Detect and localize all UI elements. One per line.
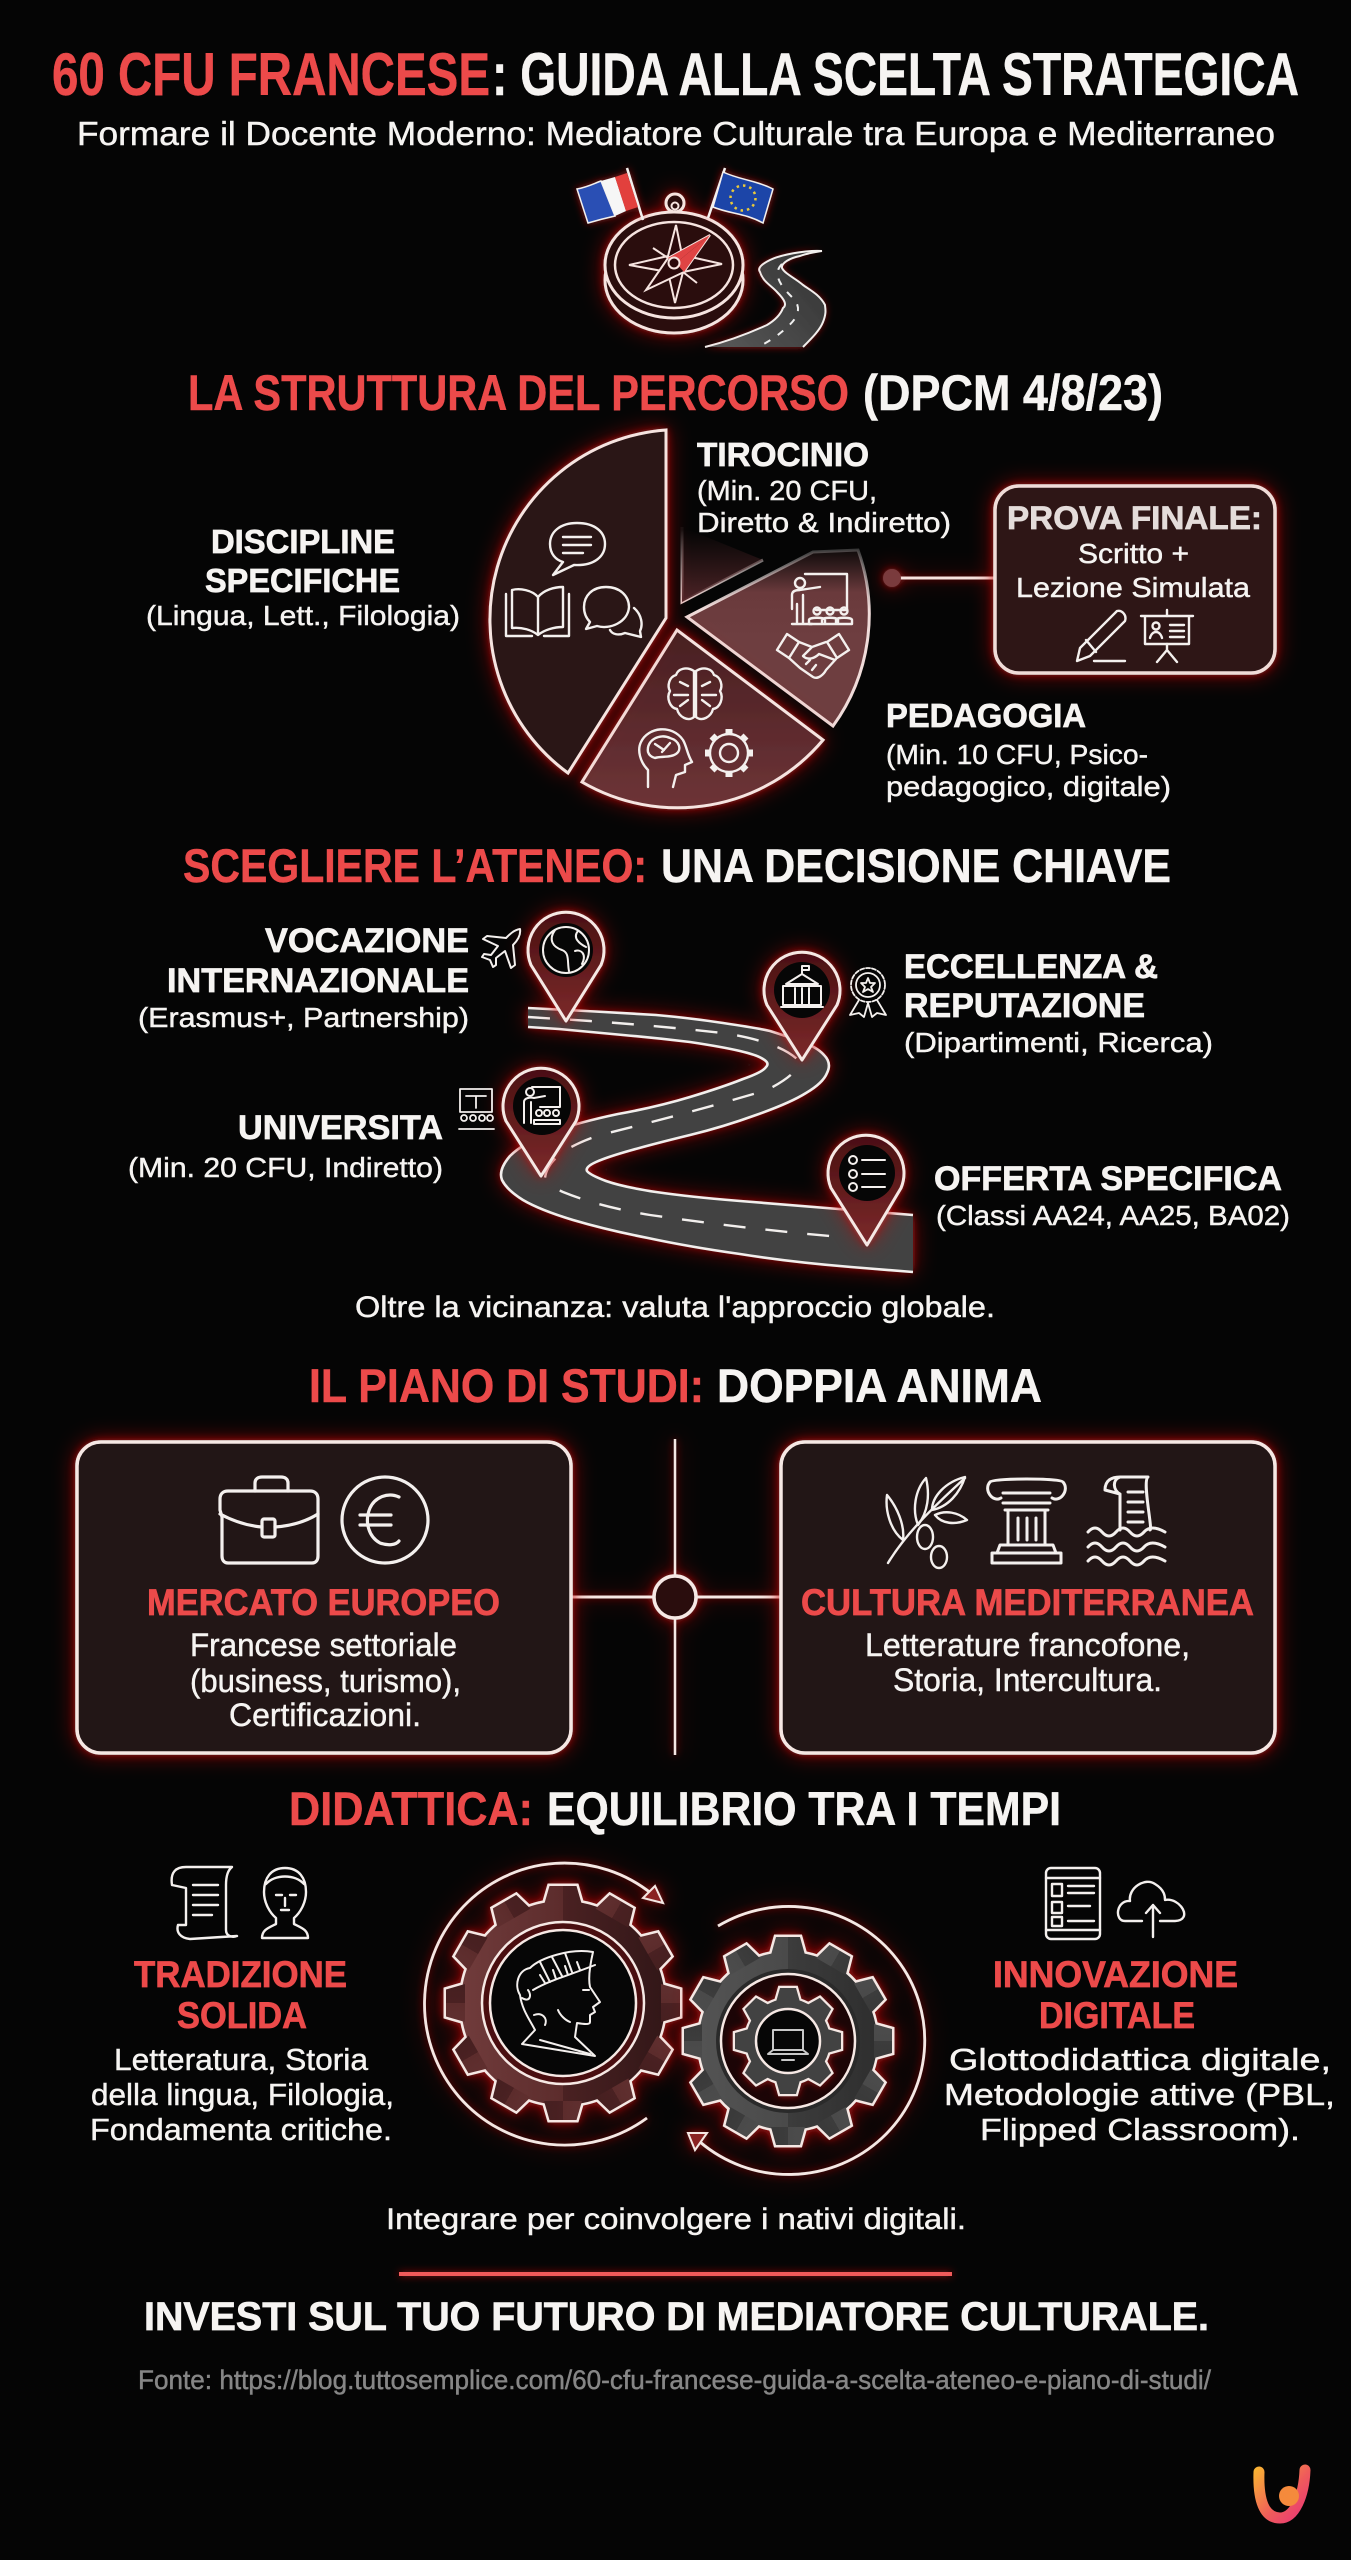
heading: didattica: [289, 1782, 1061, 1835]
panel: cultura mediterranea: [781, 1442, 1275, 1753]
label: innovazione digitale: Metodologie attive (PBL,: [944, 2077, 1335, 2112]
heading: il piano di studi: DOPPIA ANIMA: [717, 1359, 1042, 1412]
panel: cultura mediterranea: Storia, Intercultura.: [893, 1662, 1162, 1698]
winding road: [501, 1008, 913, 1272]
label: pedagogia: (Min. 10 CFU, Psico-: [886, 739, 1148, 770]
icon: teacher at board: [792, 574, 852, 624]
panel: mercato europeo: Certificazioni.: [229, 1697, 421, 1733]
divider with centre node: [570, 1439, 782, 1755]
panel: prova finale: [995, 486, 1275, 673]
label: innovazione digitale: [944, 1954, 1335, 2147]
label: offerta specifica: [934, 1160, 1290, 1231]
left gear with classical profile: [446, 1886, 680, 2120]
label: tradizione solida: della lingua, Filologia,: [91, 2077, 394, 2112]
icon: head with brain: [639, 729, 692, 787]
icon: open book: [506, 587, 569, 636]
pin 2: university building: [764, 952, 840, 1060]
icon: logo: [1259, 2470, 1305, 2518]
label: universita: (Min. 20 CFU, Indiretto): [128, 1152, 443, 1183]
panel: mercato europeo: MERCATO EUROPEO: [147, 1582, 500, 1623]
icon: parchment scroll: [172, 1867, 237, 1939]
label: tradizione solida: TRADIZIONE: [134, 1954, 347, 1995]
icon: winding road: [705, 251, 826, 347]
title: 60 CFU FRANCESE: [52, 41, 490, 108]
icon: airplane: [482, 929, 520, 968]
icon: euro coin: [342, 1477, 428, 1563]
icon: brain: [668, 668, 722, 719]
heading: il piano di studi: IL PIANO DI STUDI:: [309, 1359, 704, 1412]
label: vocazione internazionale: VOCAZIONE: [265, 922, 469, 960]
heading: scegliere l'ateneo: [183, 839, 1171, 892]
subtitle: Formare il Docente Moderno: Mediatore Culturale tra Europa e Mediterraneo: [77, 115, 1275, 152]
pin 1: globe: [528, 912, 604, 1021]
icon: speech bubble: [550, 523, 605, 575]
label: innovazione digitale: INNOVAZIONE: [993, 1954, 1238, 1995]
label: offerta specifica: OFFERTA SPECIFICA: [934, 1160, 1282, 1198]
icon: lecture board: [459, 1089, 494, 1129]
title: [52, 41, 1299, 108]
label: universita: [128, 1109, 443, 1183]
label: eccellenza e reputazione: REPUTAZIONE: [904, 987, 1145, 1025]
pin 4: checklist: [828, 1135, 904, 1245]
label: innovazione digitale: DIGITALE: [1039, 1995, 1195, 2036]
panel: prova finale: Lezione Simulata: [1016, 572, 1250, 603]
label: innovazione digitale: Flipped Classroom).: [980, 2112, 1300, 2147]
panel: mercato europeo: [77, 1442, 571, 1753]
icon: classical bust: [262, 1868, 308, 1938]
icon: handshake: [777, 634, 849, 678]
call to action: INVESTI SUL TUO FUTURO DI MEDIATORE CULTURALE.: [144, 2295, 1209, 2339]
icon: chat bubbles: [584, 587, 642, 637]
road lower edge: [501, 1027, 913, 1272]
label: vocazione internazionale: (Erasmus+, Partnership): [138, 1002, 469, 1033]
label: discipline specifiche: DISCIPLINE: [211, 523, 395, 560]
panel: mercato europeo: (business, turismo),: [190, 1663, 461, 1699]
icon: cloud upload: [1118, 1882, 1184, 1937]
label: tirocinio: Diretto & Indiretto): [697, 507, 951, 538]
slice: pedagogia: [582, 630, 823, 808]
panel: cultura mediterranea: Letterature francofone,: [865, 1627, 1190, 1663]
icon: compass with flags and road: [577, 168, 826, 348]
icon: gear: [705, 729, 753, 777]
label: tirocinio: [697, 436, 951, 538]
heading: il piano di studi: [309, 1359, 1042, 1412]
slice: tirocinio: [682, 527, 763, 602]
divider line: [399, 2272, 952, 2276]
label: tirocinio: (Min. 20 CFU,: [697, 475, 877, 506]
icon: olive branch: [887, 1477, 967, 1568]
label: innovazione digitale: Glottodidattica digitale,: [949, 2042, 1331, 2077]
icon: EU flag: [708, 168, 773, 223]
road with four stops: [501, 912, 913, 1272]
label: tirocinio: TIROCINIO: [697, 436, 869, 473]
label: pedagogia: pedagogico, digitale): [886, 771, 1171, 802]
panel: cultura mediterranea: CULTURA MEDITERRANEA: [801, 1582, 1254, 1623]
label: vocazione internazionale: [138, 922, 469, 1033]
heading: la struttura del percorso: (DPCM 4/8/23): [863, 365, 1163, 421]
icon: presentation easel: [1141, 610, 1193, 662]
label: discipline specifiche: SPECIFICHE: [205, 562, 400, 599]
graphic: interlocking gears: [425, 1863, 925, 2174]
arrow: around left gear: [425, 1863, 663, 2145]
panel: prova finale: PROVA FINALE:: [1007, 500, 1262, 536]
heading: la struttura del percorso: LA STRUTTURA DEL PERCORSO: [188, 365, 849, 421]
label: tradizione solida: Fondamenta critiche.: [90, 2112, 392, 2147]
caption: oltre la vicinanza: Oltre la vicinanza: valuta l'approccio globale.: [355, 1291, 995, 1324]
label: vocazione internazionale: INTERNAZIONALE: [167, 962, 469, 1000]
label: eccellenza e reputazione: ECCELLENZA &: [904, 948, 1158, 986]
heading: scegliere l'ateneo: UNA DECISIONE CHIAVE: [661, 839, 1171, 892]
icon: rosette: [850, 968, 886, 1017]
label: tradizione solida: [90, 1954, 394, 2147]
label: discipline specifiche: (Lingua, Lett., Filologia): [146, 600, 460, 631]
icon: briefcase: [220, 1477, 318, 1563]
slice: discipline specifiche: [490, 430, 666, 773]
label: pedagogia: [886, 697, 1171, 802]
label: universita: UNIVERSITA: [238, 1109, 443, 1147]
chart: pie of the course structure: [490, 430, 869, 808]
road centre dashes: [528, 1017, 830, 1236]
caption: integrare: Integrare per coinvolgere i nativi digitali.: [386, 2203, 966, 2236]
heading: didattica: EQUILIBRIO TRA I TEMPI: [547, 1782, 1061, 1835]
label: discipline specifiche: [146, 523, 460, 631]
slice: pratica e prova: [687, 550, 869, 726]
label: eccellenza e reputazione: (Dipartimenti, Ricerca): [904, 1027, 1213, 1058]
icon: ionic column: [988, 1479, 1065, 1563]
label: tradizione solida: Letteratura, Storia: [114, 2042, 369, 2077]
label: tradizione solida: SOLIDA: [177, 1995, 307, 2036]
connector: pie to final exam: [883, 569, 995, 587]
arrow: around right gear: [688, 1906, 925, 2174]
label: offerta specifica: (Classi AA24, AA25, BA02): [936, 1200, 1290, 1231]
source line: Fonte: https://blog.tuttosemplice.com/60-cfu-francese-guida-a-scelta-ateneo-e-piano-di-studi/: [138, 2365, 1211, 2395]
heading: scegliere l'ateneo: SCEGLIERE L’ATENEO:: [183, 839, 647, 892]
icon: pen: [1077, 611, 1125, 661]
road upper edge: [528, 1008, 913, 1215]
icon: tablet: [1046, 1868, 1100, 1939]
right gear with laptop: [684, 1937, 892, 2145]
panel: mercato europeo: Francese settoriale: [190, 1627, 457, 1663]
icon: compass: [605, 194, 743, 333]
label: eccellenza e reputazione: [904, 948, 1213, 1058]
pin 3: teacher: [503, 1068, 579, 1176]
icon: scroll and waves: [1088, 1477, 1165, 1565]
label: pedagogia: PEDAGOGIA: [886, 697, 1086, 734]
icon: French flag: [577, 168, 643, 223]
heading: didattica: DIDATTICA:: [289, 1782, 533, 1835]
panel: prova finale: Scritto +: [1078, 538, 1189, 569]
